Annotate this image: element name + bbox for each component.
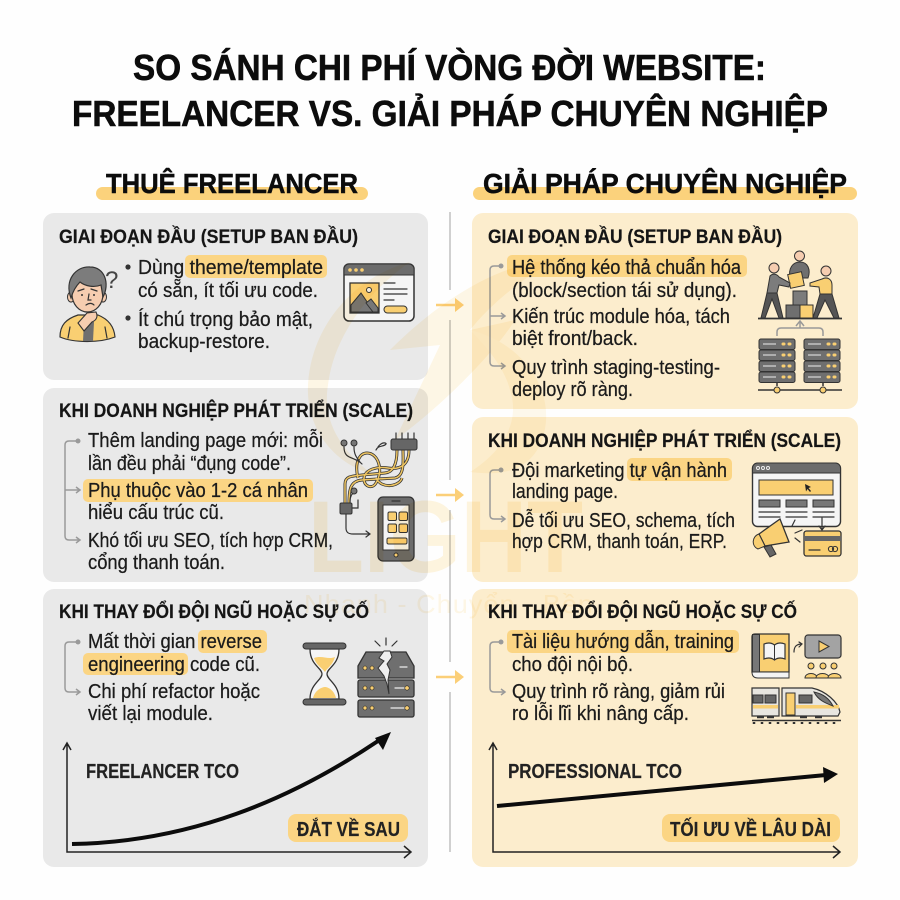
watermark: lightning logo xyxy=(308,260,555,474)
panel: professional initial stage xyxy=(472,213,858,409)
panel heading: KHI DOANH NGHIỆP PHÁT TRIỂN (SCALE) xyxy=(59,400,413,422)
text block: items: lần đều phải “đụng code”. xyxy=(88,453,291,475)
panel heading: GIAI ĐOẠN ĐẦU (SETUP BAN ĐẦU) xyxy=(488,226,782,248)
text block: items: cho đội nội bộ. xyxy=(512,654,633,676)
arrow: stage 1 xyxy=(436,298,464,312)
arrow: stage 2 xyxy=(436,488,464,502)
chart: professional TCO: TỐI ƯU VỀ LÂU DÀI xyxy=(670,817,831,841)
icon: website template xyxy=(344,264,414,321)
text block: bullets: Ít chú trọng bảo mật, xyxy=(138,308,313,331)
panel heading: GIAI ĐOẠN ĐẦU (SETUP BAN ĐẦU) xyxy=(59,226,358,248)
icon: high speed train xyxy=(752,688,841,724)
panel: freelancer team change stage xyxy=(43,589,428,867)
panel heading: KHI THAY ĐỔI ĐỘI NGŨ HOẶC SỰ CỐ xyxy=(59,601,369,623)
connector xyxy=(490,640,505,695)
heading: freelancer column: THUÊ FREELANCER xyxy=(106,168,358,199)
arrow: stage 3 xyxy=(436,670,464,684)
chart: professional TCO xyxy=(489,743,840,858)
text block: items: hiểu cấu trúc cũ. xyxy=(88,502,224,524)
chart: professional TCO: PROFESSIONAL TCO xyxy=(508,761,682,783)
text block: items: Kiến trúc module hóa, tách xyxy=(512,306,730,328)
chart: freelancer TCO: FREELANCER TCO xyxy=(86,761,239,783)
icon: landing page builder xyxy=(752,463,840,526)
connector xyxy=(490,468,505,522)
text block: items: engineering code cũ. xyxy=(88,654,260,676)
heading: professional column: GIẢI PHÁP CHUYÊN NGHIỆP xyxy=(483,167,847,199)
icon: confused person: ? xyxy=(105,267,118,294)
icon: broken server xyxy=(358,638,414,717)
text block: items: hợp CRM, thanh toán, ERP. xyxy=(512,531,727,553)
text block: items: Dễ tối ưu SEO, schema, tích xyxy=(512,509,735,532)
text block: items: viết lại module. xyxy=(88,703,213,725)
panel: professional team change stage xyxy=(472,589,858,867)
title: SO SÁNH CHI PHÍ VÒNG ĐỜI WEBSITE: xyxy=(133,46,766,88)
icon: megaphone xyxy=(753,519,802,557)
icon: tangled cables xyxy=(340,433,417,561)
text block: bullets: Dùng theme/template xyxy=(138,257,323,279)
text block: items: cổng thanh toán. xyxy=(88,552,225,574)
text block: items: Mất thời gian reverse xyxy=(88,631,262,653)
text block: items: ro lỗi lĩi khi nâng cấp. xyxy=(512,702,689,725)
icon: team building blocks xyxy=(758,251,842,318)
text block: items: Tài liệu hướng dẫn, training xyxy=(512,630,734,653)
text block: items: Chi phí refactor hoặc xyxy=(88,681,260,703)
panel: professional scaling stage xyxy=(472,417,858,582)
text block: items: Đội marketing tự vận hành xyxy=(512,460,727,482)
panel: freelancer scaling stage xyxy=(43,388,428,582)
watermark: brand name: Nhanh - Chuyển - Bền xyxy=(304,589,594,619)
text block: items xyxy=(507,255,747,401)
text block: items: Khó tối ưu SEO, tích hợp CRM, xyxy=(88,530,333,552)
icon: confused person xyxy=(60,267,118,342)
panel heading: KHI THAY ĐỔI ĐỘI NGŨ HOẶC SỰ CỐ xyxy=(488,601,797,623)
text block: items: landing page. xyxy=(512,481,618,503)
text block: items: Phụ thuộc vào 1-2 cá nhân xyxy=(88,480,308,502)
text block: items xyxy=(512,458,735,553)
text block: bullets: backup-restore. xyxy=(138,331,270,353)
panel heading: KHI DOANH NGHIỆP PHÁT TRIỂN (SCALE) xyxy=(488,430,841,452)
icon: manual book xyxy=(752,634,789,678)
title: FREELANCER VS. GIẢI PHÁP CHUYÊN NGHIỆP xyxy=(72,92,828,134)
icon: server racks xyxy=(758,321,842,393)
chart: freelancer TCO xyxy=(63,732,411,858)
text block: items: Quy trình staging-testing- xyxy=(512,357,720,379)
center divider xyxy=(449,212,451,852)
text block: items: Thêm landing page mới: mỗi xyxy=(88,429,323,452)
icon: hourglass xyxy=(303,643,346,705)
text block: items xyxy=(83,630,267,725)
text block: items: Hệ thống kéo thả chuẩn hóa xyxy=(512,257,742,279)
watermark: brand name: LIGHT xyxy=(308,480,583,594)
connector xyxy=(65,640,80,695)
text block: items xyxy=(83,429,333,574)
panel: freelancer initial stage xyxy=(43,213,428,380)
text block: bullets: có sẵn, ít tối ưu code. xyxy=(138,279,318,302)
title xyxy=(72,46,828,134)
connector xyxy=(65,438,80,543)
connector xyxy=(490,264,505,369)
text block: items: Quy trình rõ ràng, giảm rủi xyxy=(512,681,725,703)
text block: items: (block/section tái sử dụng). xyxy=(512,280,737,302)
icon: payment card xyxy=(804,518,841,556)
chart: freelancer TCO: ĐẮT VỀ SAU xyxy=(297,817,400,841)
text block: items xyxy=(507,630,739,725)
text block: bullets xyxy=(125,255,327,353)
text block: items: biệt front/back. xyxy=(512,328,638,350)
icon: video training xyxy=(794,635,841,678)
text block: items: deploy rõ ràng. xyxy=(512,379,633,401)
